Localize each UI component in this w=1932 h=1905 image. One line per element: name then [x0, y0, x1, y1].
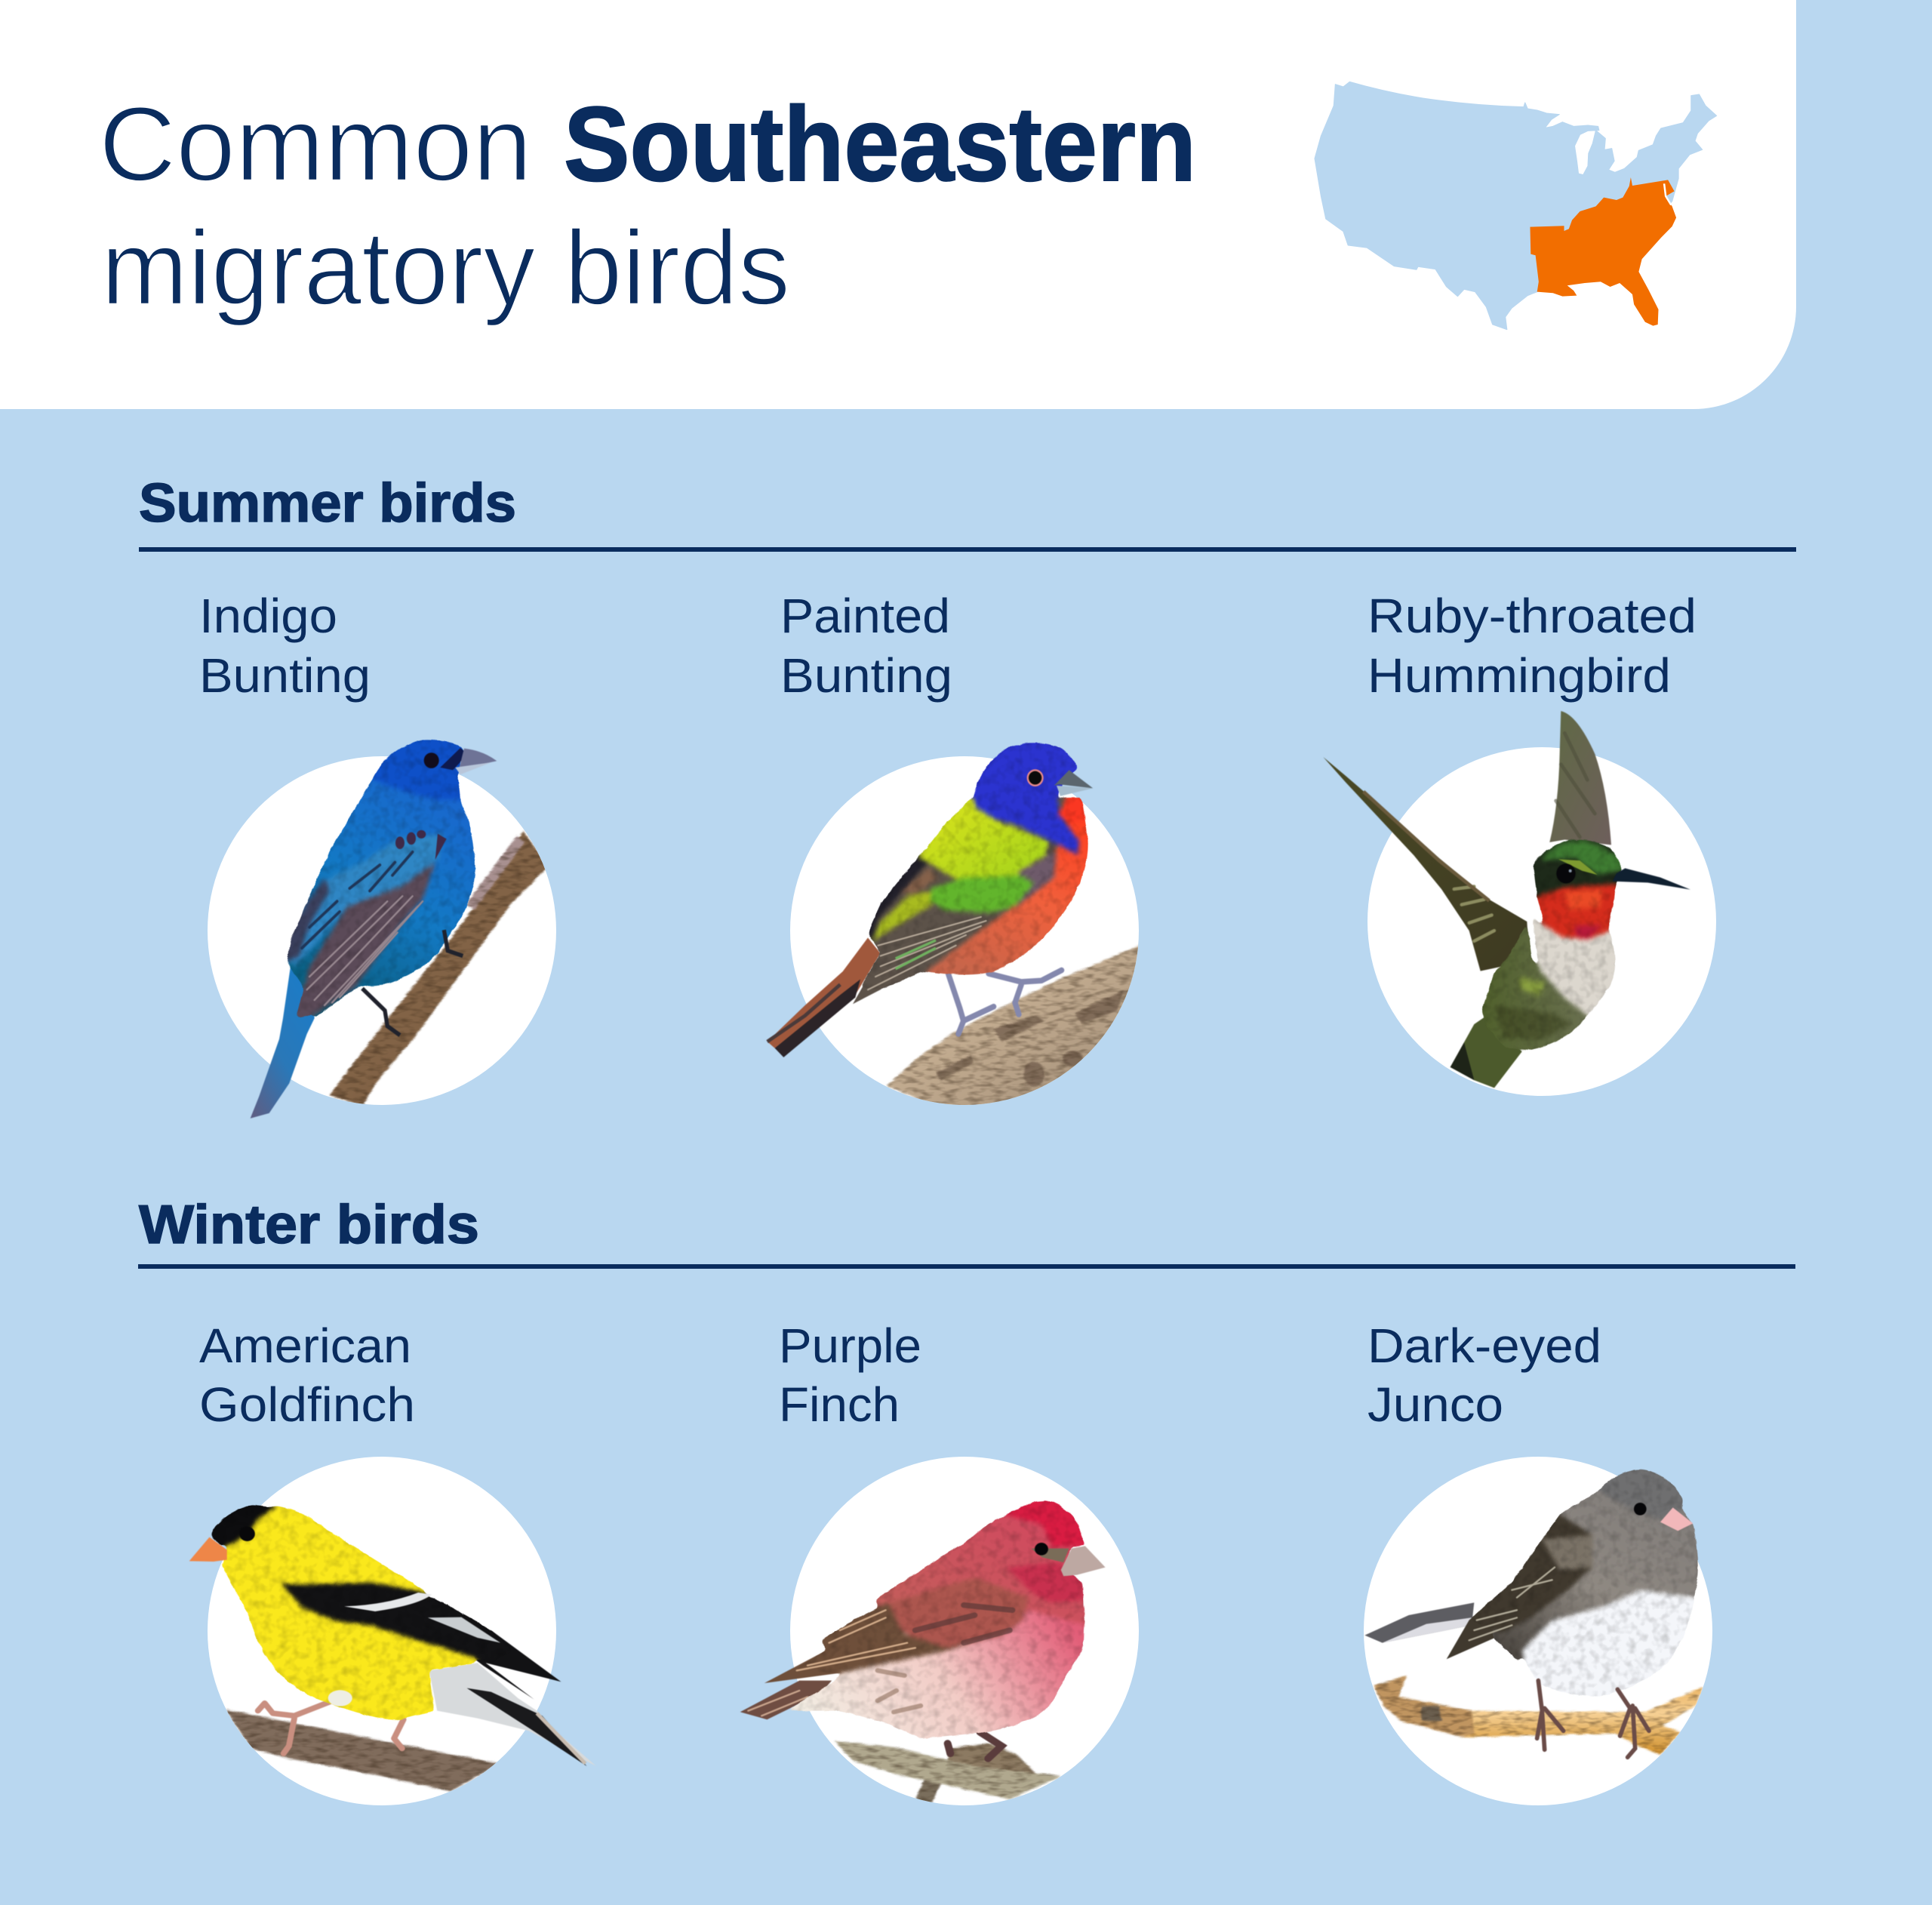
wing coverts: [888, 1577, 1029, 1648]
branch: [835, 1741, 1061, 1806]
branch: [226, 1710, 499, 1791]
yellow body: [222, 1506, 478, 1720]
head: [1598, 1470, 1683, 1519]
wing bruise shoulder: [1014, 852, 1057, 909]
label: American Goldfinch: [199, 1319, 415, 1432]
wing primaries: [296, 863, 435, 1018]
ruby gorget: [1537, 884, 1617, 940]
bird: Indigo Bunting: [251, 740, 497, 1119]
plumage: [786, 1500, 1085, 1738]
eye: [1027, 769, 1044, 786]
title: [99, 85, 1196, 327]
primary stripes: [797, 1610, 915, 1670]
tail black: [467, 1688, 586, 1766]
circle: [208, 1457, 556, 1805]
tail dark: [1451, 1042, 1474, 1080]
belly: [926, 797, 1088, 974]
plumage: [1481, 839, 1621, 1050]
label: Painted Bunting: [780, 589, 952, 703]
undertail coverts: [429, 1663, 596, 1766]
thigh: [328, 1690, 352, 1706]
gorget highlight: [1564, 889, 1602, 910]
white wing edge: [428, 1617, 500, 1643]
map: Chesapeake Bay: [1664, 183, 1671, 205]
beak: [189, 1537, 227, 1562]
covert shadows: [915, 1605, 1012, 1643]
label: Painted Bunting: Bunting: [780, 648, 952, 703]
eye: [239, 1527, 255, 1541]
tail: [251, 966, 315, 1119]
tail: [1451, 1014, 1522, 1088]
branch: [330, 831, 549, 1106]
shoulder spots: [395, 830, 447, 860]
eye: [1556, 863, 1576, 883]
brown primaries: [794, 1602, 1001, 1673]
feet: [362, 930, 463, 1036]
feet and tail: [740, 1651, 1001, 1759]
rule: Winter birds: [138, 1264, 1795, 1269]
gray body: [1492, 1470, 1698, 1660]
lore: [1031, 1549, 1069, 1562]
eye: [424, 752, 439, 768]
wing dark edge: [287, 878, 330, 962]
twig perch: [1374, 1676, 1703, 1755]
wing stripes: [868, 917, 986, 989]
bird: American Goldfinch: [189, 1504, 596, 1766]
tail: [768, 937, 896, 1057]
label: Dark-eyed Junco: [1367, 1319, 1601, 1432]
green coverts: [931, 876, 1036, 913]
card: Dark-eyed Junco: [1364, 1319, 1712, 1805]
label: Ruby-throated Hummingbird: [1367, 589, 1697, 703]
upper wing bars: [1556, 733, 1595, 837]
left wing feathers: [1454, 887, 1494, 941]
label: Indigo Bunting: Bunting: [199, 648, 371, 703]
eye: [1035, 1543, 1048, 1556]
beak: [1613, 868, 1690, 890]
flank streaks: [878, 1670, 921, 1712]
black wing: [281, 1583, 512, 1663]
details: [1469, 1503, 1693, 1757]
feet and tail: [258, 1630, 596, 1766]
label: Painted Bunting: Painted: [780, 589, 950, 643]
primary tips: [764, 1651, 840, 1683]
label: American Goldfinch: American: [199, 1319, 411, 1373]
map: United States silhouette: [1315, 82, 1717, 330]
plumage: [287, 740, 475, 1018]
title: Common: [99, 85, 532, 203]
heading: Winter birds: Winter birds: [139, 1195, 479, 1255]
label: Dark-eyed Junco: Dark-eyed: [1367, 1319, 1601, 1373]
card: Painted Bunting: [768, 589, 1147, 1115]
bird: Dark-eyed Junco: [1364, 1470, 1698, 1757]
label: Ruby-throated Hummingbird: Hummingbird: [1367, 648, 1671, 703]
head shading: [372, 740, 464, 800]
circle: [1364, 1457, 1712, 1805]
title: migratory birds: [101, 208, 790, 327]
wing coverts: [287, 834, 443, 965]
wing top edge: [1364, 792, 1489, 900]
map: contiguous United States with Southeast highlighted: [1315, 82, 1717, 330]
plumage: [860, 743, 1088, 989]
eye: [1634, 1503, 1647, 1516]
details: [302, 748, 497, 1036]
circle: [790, 1457, 1139, 1805]
wing tips: [451, 1630, 561, 1700]
label: Purple Finch: Purple: [779, 1319, 921, 1373]
beak: [459, 749, 497, 769]
label: Indigo Bunting: Indigo: [199, 589, 337, 643]
legs: [949, 970, 1062, 1034]
red throat: [1058, 797, 1085, 825]
white breast: [1532, 916, 1615, 1015]
green crown: [1541, 841, 1621, 875]
rule: Summer birds: [139, 547, 1796, 552]
pink-white body: [786, 1605, 1084, 1738]
wing stripes: [1469, 1568, 1555, 1640]
plumage: [211, 1504, 512, 1720]
details: [1556, 859, 1690, 890]
underlay: [860, 797, 1087, 989]
beak: [1660, 1507, 1693, 1531]
wing dark edge: [868, 857, 928, 940]
wing brown feathers: [898, 867, 938, 894]
gorget crimson: [1575, 925, 1602, 939]
log perch: [887, 944, 1147, 1115]
face mask: [440, 748, 466, 770]
red upper: [875, 1500, 1085, 1643]
tail: [740, 1681, 832, 1719]
beak: [1061, 1546, 1106, 1576]
upper wing: [1549, 711, 1611, 845]
heading: Summer birds: Summer birds: [139, 473, 516, 534]
label: Indigo Bunting: [199, 589, 371, 703]
card: American Goldfinch: [189, 1319, 596, 1805]
upper head: [1534, 839, 1621, 897]
label: Dark-eyed Junco: Junco: [1367, 1377, 1503, 1432]
card: Indigo Bunting: [199, 589, 556, 1119]
wing green sheen: [896, 940, 936, 969]
wing yellow-green panel: [873, 891, 934, 940]
tail: [1364, 1600, 1512, 1659]
circle: [208, 756, 556, 1105]
white wing bar: [344, 1593, 432, 1611]
label: American Goldfinch: Goldfinch: [199, 1377, 415, 1432]
left wing: [1323, 757, 1530, 971]
label: Purple Finch: [779, 1319, 921, 1432]
feet: [948, 1732, 1001, 1759]
wing upper wash: [1542, 1534, 1592, 1570]
circle: [1367, 747, 1716, 1096]
card: Purple Finch: [740, 1319, 1139, 1806]
bird: Purple Finch: [740, 1500, 1106, 1759]
white belly: [1522, 1590, 1694, 1697]
bird: Painted Bunting: [768, 743, 1093, 1057]
body: [1481, 923, 1587, 1050]
blue head: [974, 743, 1079, 854]
map: Southeast region: [1530, 177, 1676, 326]
title: Southeastern: [564, 85, 1196, 203]
crown crest: [1004, 1500, 1085, 1548]
label: Purple Finch: Finch: [779, 1377, 900, 1432]
wings: [1323, 711, 1611, 1088]
wing: [1469, 1515, 1592, 1633]
circle: [790, 756, 1139, 1105]
legs: [1537, 1681, 1649, 1757]
covert stripes: [302, 852, 413, 948]
header panel: [0, 0, 1796, 409]
details: [189, 1527, 500, 1706]
bird: Ruby-throated Hummingbird: [1323, 711, 1690, 1088]
card: Ruby-throated Hummingbird: [1323, 589, 1716, 1096]
body speckle: [1494, 1006, 1572, 1040]
green flecks: [1519, 977, 1545, 996]
black cap: [211, 1504, 277, 1546]
details: [868, 769, 1093, 989]
wing stripes: [307, 896, 423, 1005]
plumage: [1469, 1470, 1698, 1697]
feet: [258, 1702, 404, 1753]
body: [287, 740, 475, 1018]
gold eyebrow: [1558, 859, 1598, 875]
tail stripes: [748, 1691, 808, 1716]
throat deep red: [1007, 1562, 1082, 1602]
details: [797, 1543, 1106, 1712]
beak: [1054, 770, 1093, 788]
tail light edge: [537, 1713, 586, 1764]
mantle yellow-green: [919, 799, 1049, 883]
label: Ruby-throated Hummingbird: Ruby-throated: [1367, 589, 1697, 643]
